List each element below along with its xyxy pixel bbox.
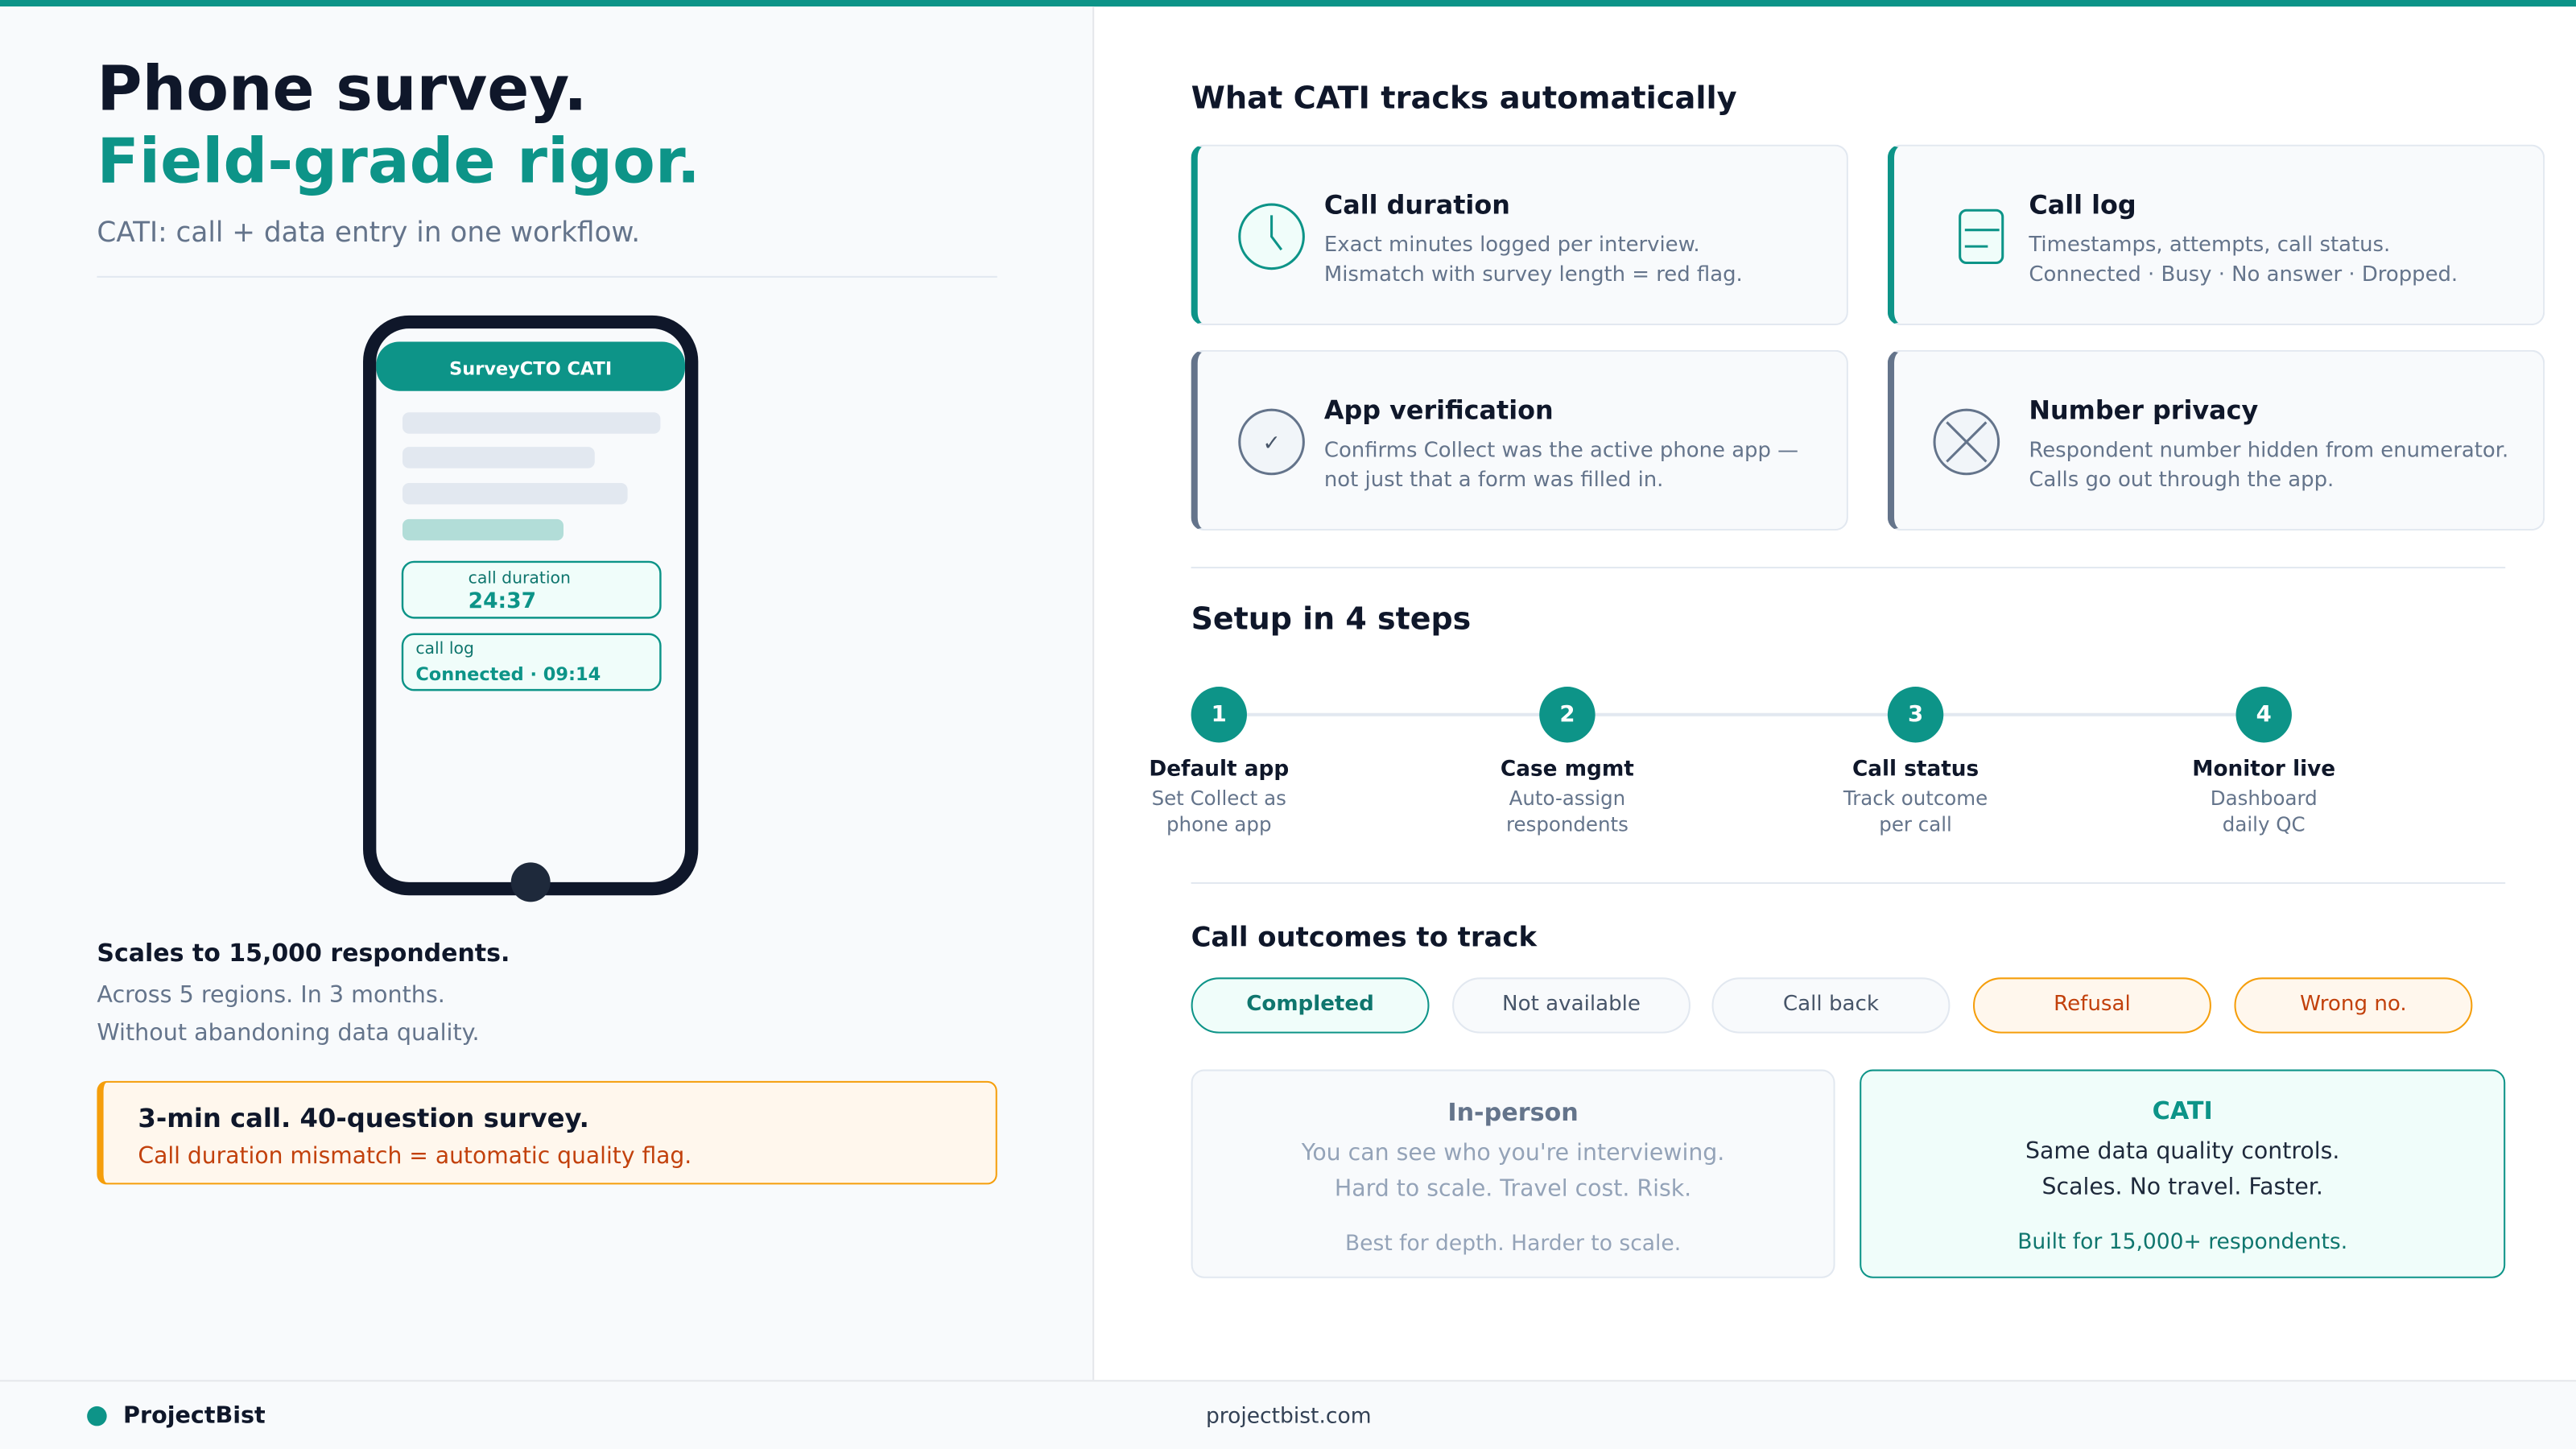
heading: setup: Setup in 4 steps: [1191, 603, 1471, 638]
card: call duration: Exact minutes logged per interview.: [1324, 232, 1700, 256]
heading: tracks: What CATI tracks automatically: [1191, 82, 1737, 117]
heading: outcomes: Call outcomes to track: [1191, 922, 1537, 953]
title: Phone survey.: [97, 52, 587, 125]
step 2: [1501, 687, 1634, 836]
pill: wrong no: [2234, 977, 2472, 1034]
card: app verification: [1191, 350, 1848, 530]
card: call log: Call log: [2029, 191, 2136, 220]
card: number privacy: Number privacy: [2029, 396, 2258, 426]
step 1: Default app: [1149, 758, 1289, 782]
callout: 3-min call. 40-question survey.: [138, 1102, 589, 1133]
card: call log: [1888, 145, 2545, 325]
step 1: [1149, 687, 1289, 836]
footer url: projectbist.com: [1206, 1405, 1372, 1429]
compare: in-person: Hard to scale. Travel cost. Risk.: [1335, 1176, 1691, 1203]
footer: ProjectBist: [123, 1403, 266, 1429]
top accent bar: [0, 0, 2576, 6]
phone illustration: Connected · 09:14: [415, 664, 601, 685]
scale details: [97, 982, 480, 1046]
pill: completed: [1191, 977, 1429, 1034]
card: call duration: Mismatch with survey length = red flag.: [1324, 261, 1743, 286]
phone illustration: SurveyCTO CATI: [449, 358, 612, 379]
step 4: daily QC: [2223, 813, 2306, 836]
scale details: Without abandoning data quality.: [97, 1020, 480, 1046]
phone illustration: call log: [415, 638, 474, 658]
callout: [97, 1081, 997, 1184]
step 3: per call: [1879, 813, 1952, 836]
compare: in-person: Best for depth. Harder to scale.: [1345, 1232, 1681, 1257]
phone illustration: call duration: [469, 568, 571, 587]
title: [97, 52, 700, 197]
step 1: Set Collect as: [1152, 787, 1286, 810]
left panel background: [0, 6, 1094, 1380]
card: app verification: Confirms Collect was the active phone app —: [1324, 437, 1798, 461]
pill: refusal: [1973, 977, 2211, 1034]
compare: CATI: [1860, 1070, 2505, 1278]
footer: [0, 1380, 2576, 1449]
step 2: Case mgmt: [1501, 758, 1634, 782]
compare: CATI: Same data quality controls.: [2025, 1138, 2339, 1165]
scale statement: Scales to 15,000 respondents.: [97, 939, 510, 968]
card: call log: Timestamps, attempts, call status.: [2029, 232, 2390, 256]
step 3: 3: [1908, 701, 1923, 728]
step 1: 1: [1212, 701, 1227, 728]
footer brand: [87, 1406, 107, 1426]
subtitle: CATI: call + data entry in one workflow.: [97, 215, 640, 248]
step 4: Monitor live: [2192, 758, 2335, 782]
callout: Call duration mismatch = automatic quality flag.: [138, 1143, 691, 1170]
pill: not available: [1452, 977, 1690, 1034]
step 2: respondents: [1506, 813, 1629, 836]
card: call duration: [1191, 145, 1848, 325]
step 2: 2: [1559, 701, 1575, 728]
step 3: Call status: [1852, 758, 1979, 782]
compare: in-person: [1191, 1070, 1835, 1278]
step 4: Dashboard: [2211, 787, 2318, 810]
card: number privacy: [1888, 350, 2545, 530]
phone illustration: [363, 316, 699, 902]
pill: completed: Completed: [1246, 993, 1374, 1017]
pill: wrong no: Wrong no.: [2300, 993, 2407, 1017]
step 2: Auto-assign: [1509, 787, 1625, 810]
title: Field-grade rigor.: [97, 125, 700, 197]
pill: refusal: Refusal: [2054, 993, 2131, 1017]
scale details: Across 5 regions. In 3 months.: [97, 982, 445, 1009]
compare: CATI: Built for 15,000+ respondents.: [2017, 1231, 2347, 1255]
card: call duration: Call duration: [1324, 191, 1510, 220]
card: number privacy: Calls go out through the app.: [2029, 467, 2334, 491]
step 4: 4: [2256, 701, 2272, 728]
pill: not available: Not available: [1502, 993, 1641, 1017]
card: call log: Connected · Busy · No answer · Dropped.: [2029, 261, 2458, 286]
pill: call back: Call back: [1783, 993, 1879, 1017]
compare: in-person: In-person: [1447, 1099, 1579, 1127]
step 4: [2192, 687, 2335, 836]
compare: in-person: You can see who you're interviewing.: [1302, 1140, 1724, 1166]
card: number privacy: Respondent number hidden from enumerator.: [2029, 437, 2508, 461]
compare: CATI: CATI: [2153, 1097, 2213, 1125]
step 3: Track outcome: [1843, 787, 1988, 810]
compare: CATI: Scales. No travel. Faster.: [2042, 1174, 2323, 1201]
pill: call back: [1712, 977, 1950, 1034]
phone illustration: 24:37: [469, 588, 536, 613]
card: app verification: App verification: [1324, 396, 1554, 426]
step 3: [1843, 687, 1988, 836]
step 1: phone app: [1166, 813, 1272, 836]
card: app verification: not just that a form was filled in.: [1324, 467, 1663, 491]
card: app verification: ✓: [1262, 431, 1281, 456]
